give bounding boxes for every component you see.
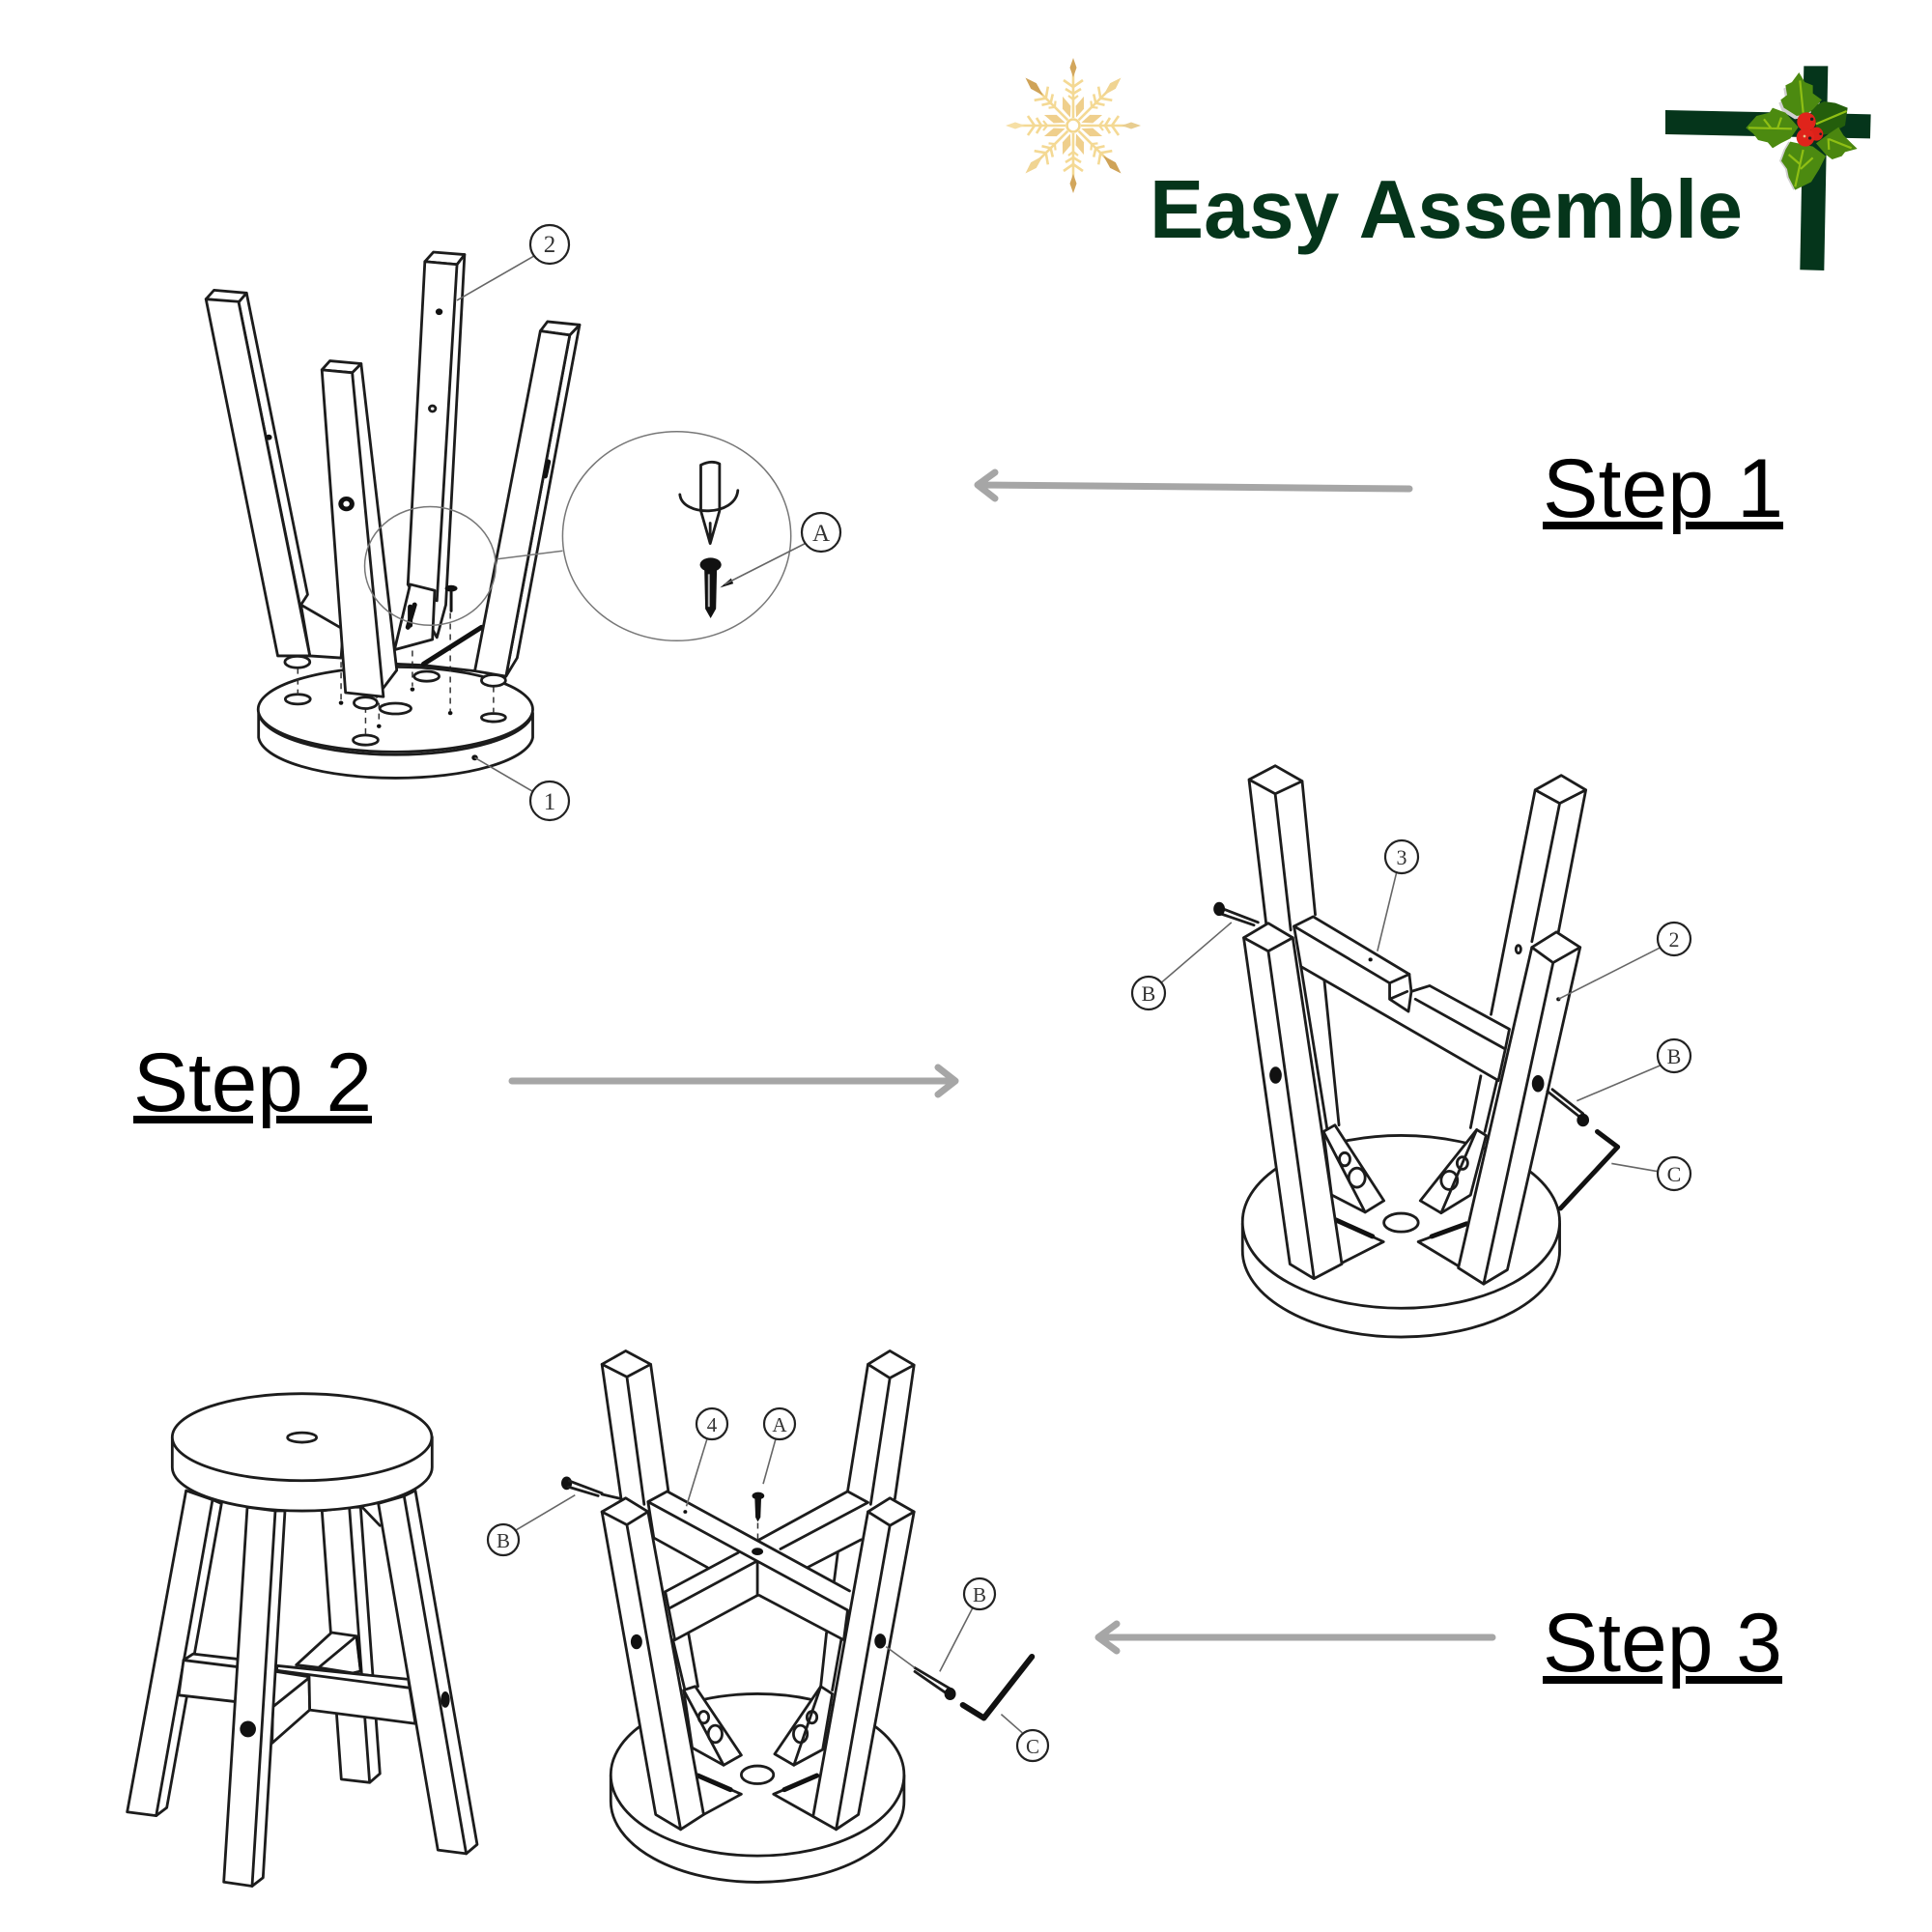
title: Easy Assemble bbox=[1150, 164, 1743, 256]
diagram: step 1 attaching legs to seat: 1 bbox=[544, 789, 555, 815]
diagram: step 3 attaching second crossbar: 4 bbox=[707, 1413, 718, 1436]
heading: Step 1: Step 1 bbox=[1543, 442, 1783, 535]
diagram: step 2 attaching first crossbar: B bbox=[1667, 1044, 1681, 1068]
diagram: step 2 attaching first crossbar: 2 bbox=[1669, 927, 1679, 952]
diagram: step 2 attaching first crossbar: C bbox=[1667, 1162, 1681, 1186]
diagram: step 3 attaching second crossbar: A bbox=[772, 1413, 787, 1436]
crossbars bbox=[648, 1492, 868, 1640]
diagram: step 2 attaching first crossbar: 3 bbox=[1397, 845, 1406, 869]
left leg bbox=[206, 290, 310, 668]
far left leg bbox=[128, 1491, 221, 1816]
heading: Step 3: Step 3 bbox=[1543, 1597, 1782, 1690]
diagram: step 1 attaching legs to seat: 2 bbox=[544, 232, 555, 258]
diagram: step 2 attaching first crossbar bbox=[1132, 766, 1690, 1337]
back leg bbox=[408, 252, 465, 638]
arrow: step 1 points left bbox=[978, 472, 1409, 498]
diagram: finished stool bbox=[128, 1394, 477, 1886]
seat bbox=[172, 1437, 432, 1511]
diagram: step 3 attaching second crossbar: C bbox=[1026, 1735, 1039, 1758]
crossbar bbox=[297, 1633, 360, 1673]
brackets bbox=[684, 1687, 741, 1765]
front legs bbox=[1244, 923, 1342, 1279]
right leg bbox=[379, 1491, 477, 1854]
front legs bbox=[602, 1498, 703, 1830]
right leg bbox=[475, 322, 580, 686]
diagram: step 3 attaching second crossbar bbox=[488, 1350, 1048, 1882]
back legs bbox=[602, 1350, 697, 1689]
front leg bbox=[322, 361, 397, 709]
front leg bbox=[224, 1507, 285, 1886]
arrow: step 2 points right bbox=[512, 1067, 955, 1094]
back leg bbox=[322, 1507, 380, 1782]
diagram: step 3 attaching second crossbar: B bbox=[973, 1583, 986, 1606]
diagram: step 2 attaching first crossbar: B bbox=[1142, 981, 1155, 1006]
brackets bbox=[1323, 1125, 1384, 1212]
crossbar bbox=[1294, 917, 1510, 1081]
icon: green cross with holly bbox=[1665, 66, 1871, 270]
arrow: step 3 points left bbox=[1098, 1624, 1492, 1651]
diagram: step 3 attaching second crossbar: B bbox=[497, 1529, 510, 1552]
back legs bbox=[1249, 766, 1339, 1131]
icon: gold snowflake bbox=[1006, 58, 1141, 193]
diagram: step 1 attaching legs to seat bbox=[206, 225, 840, 820]
heading: Step 2: Step 2 bbox=[133, 1037, 372, 1129]
diagram: step 1 attaching legs to seat: A bbox=[812, 521, 830, 547]
